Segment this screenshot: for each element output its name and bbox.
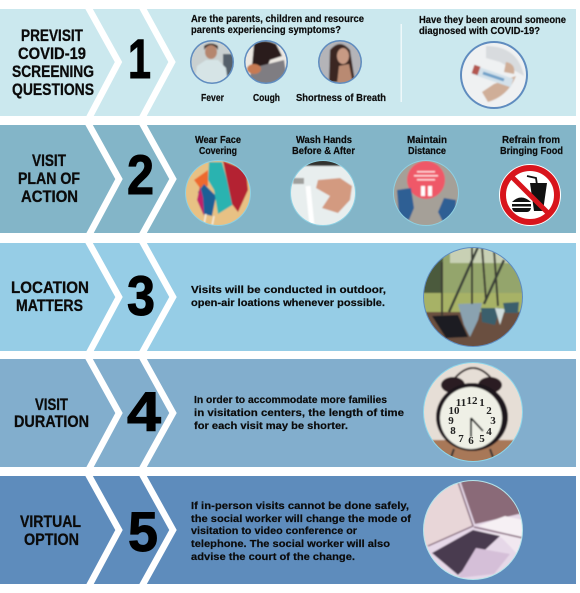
question: symptoms: parents experiencing symptoms? [191, 24, 341, 36]
symptom labels [201, 92, 386, 104]
number 3: 3 [127, 264, 155, 327]
icon: swings photo [423, 247, 523, 350]
clock numerals: 9 [448, 415, 454, 427]
heading: visit plan of action [18, 152, 80, 206]
number 2: 2 [127, 143, 154, 206]
text: virtual description: If in-person visits cannot be done safely, [191, 500, 409, 512]
text: virtual description: advise the court of the change. [191, 551, 355, 563]
heading: location matters: LOCATION [11, 279, 89, 297]
clock numerals: 12 [466, 395, 478, 407]
icon: maintain distance sticker photo [393, 160, 459, 226]
label: wash hands [292, 134, 355, 157]
icon: cough photo [244, 40, 288, 84]
label: wear face covering [195, 134, 241, 157]
number 4: 4 [127, 380, 161, 443]
text: location description: open-air loations whenever possible. [191, 297, 385, 309]
heading: previsit covid-19 screening questions: QUESTIONS [12, 81, 94, 99]
heading: previsit covid-19 screening questions: SCREENING [12, 63, 94, 81]
heading: previsit covid-19 screening questions [12, 27, 94, 99]
icon: fever photo [190, 40, 235, 84]
text: virtual description [191, 500, 412, 563]
clock numerals: 8 [450, 425, 456, 437]
label: wash hands: Wash Hands [296, 134, 352, 146]
number 5: 5 [128, 500, 158, 563]
heading: visit duration [14, 396, 89, 431]
panel: previsit screening questions [0, 7, 576, 118]
panel: visit plan of action [0, 123, 576, 235]
clock numerals [448, 395, 496, 447]
label: maintain distance: Maintain [407, 134, 447, 146]
question: exposure: Have they been around someone [419, 14, 566, 26]
icon: face masks photo [185, 160, 251, 226]
heading: location matters [11, 279, 89, 315]
text: duration description [194, 394, 404, 432]
panel: location matters [0, 241, 576, 353]
clock numerals: 11 [456, 397, 466, 409]
icon: laptop photo [423, 480, 523, 580]
heading: virtual option: VIRTUAL [20, 513, 81, 531]
clock numerals: 3 [490, 415, 496, 427]
label: wash hands: Before & After [292, 145, 355, 157]
label: wear face covering: Covering [199, 145, 237, 157]
symptom labels: Shortness of Breath [296, 92, 386, 104]
symptom labels: Fever [201, 92, 224, 104]
text: location description: Visits will be conducted in outdoor, [191, 284, 386, 296]
icon: no food sign [499, 164, 561, 226]
number 1: 1 [128, 27, 151, 90]
label: maintain distance [407, 134, 447, 157]
panel: visit duration [0, 357, 576, 469]
heading: virtual option: OPTION [24, 531, 79, 549]
clock numerals: 4 [486, 426, 492, 438]
symptom labels: Cough [253, 92, 280, 104]
question: exposure: diagnosed with COVID-19? [419, 25, 540, 37]
clock numerals: 1 [479, 397, 485, 409]
label: refrain from bringing food: Refrain from [502, 134, 560, 146]
text: virtual description: the social worker will change the mode of [191, 513, 412, 525]
icon: shortness of breath photo [318, 40, 362, 84]
heading: location matters: MATTERS [16, 297, 83, 315]
heading: previsit covid-19 screening questions: COVID-19 [18, 45, 86, 63]
clock numerals: 6 [468, 435, 474, 447]
heading: visit plan of action: PLAN OF [18, 170, 80, 188]
heading: visit duration: DURATION [14, 413, 89, 431]
label: refrain from bringing food [500, 134, 563, 157]
heading: visit plan of action: ACTION [21, 188, 78, 206]
icon: test tube photo [460, 40, 530, 110]
heading: virtual option [20, 513, 81, 549]
question: exposure [419, 14, 566, 37]
clock numerals: 2 [486, 405, 492, 417]
heading: visit duration: VISIT [35, 396, 68, 414]
clock numerals: 10 [448, 405, 460, 417]
text: virtual description: telephone. The social worker will also [191, 538, 390, 550]
clock numerals: 5 [479, 433, 485, 445]
label: refrain from bringing food: Bringing Food [500, 145, 563, 157]
heading: previsit covid-19 screening questions: PREVISIT [21, 27, 83, 45]
text: location description [191, 284, 386, 309]
question: symptoms [191, 13, 364, 36]
clock numerals: 7 [458, 433, 464, 445]
icon: alarm clock photo [423, 362, 523, 464]
icon: wash hands photo [290, 160, 356, 226]
label: maintain distance: Distance [408, 145, 446, 157]
question: symptoms: Are the parents, children and resource [191, 13, 364, 25]
panel: virtual option [0, 474, 576, 586]
heading: visit plan of action: VISIT [32, 152, 66, 170]
text: virtual description: visitation to video conference or [191, 525, 357, 537]
label: wear face covering: Wear Face [195, 134, 241, 146]
text: duration description: in visitation centers, the length of time [194, 407, 404, 419]
text: duration description: In order to accommodate more families [194, 394, 387, 406]
text: duration description: for each visit may be shorter. [194, 420, 348, 432]
